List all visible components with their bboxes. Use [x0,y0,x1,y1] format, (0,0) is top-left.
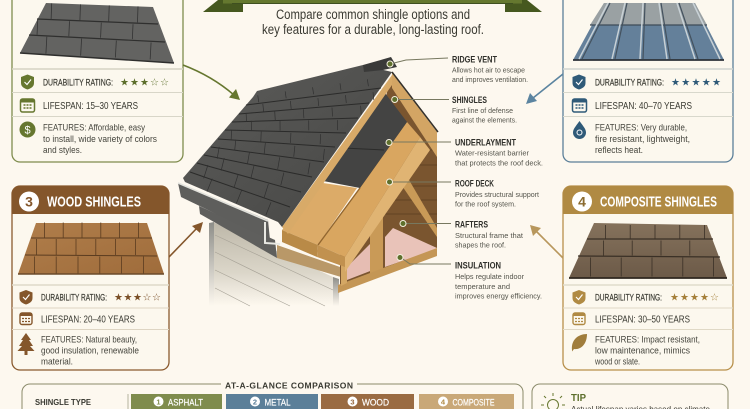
arrow: asphalt to roof [183,65,240,100]
front rake board [282,75,392,234]
callout: insulation: INSULATION [455,260,501,272]
durability rating: ★★★☆☆ [120,78,169,88]
callout: rafters: RAFTERS [455,220,488,230]
metal roofing swatch [573,3,724,60]
column: wood [321,394,414,409]
composite shingle swatch [569,223,727,278]
durability rating: DURABILITY RATING: [43,78,113,88]
lifespan: LIFESPAN: 15–30 YEARS [43,101,138,112]
features [594,334,700,366]
durability rating: DURABILITY RATING: [595,292,662,304]
post [370,205,383,276]
column: metal: METAL [264,398,290,408]
ridge vent [363,57,397,72]
icon: calendar [572,99,586,112]
asphalt shingle swatch [20,3,174,63]
features: FEATURES: Natural beauty, [41,334,137,344]
icon: tree [18,333,34,355]
panel: asphalt shingles [12,0,183,162]
durability rating: DURABILITY RATING: [595,78,664,88]
callout: shingles: SHINGLES [452,95,487,106]
callout: ridge vent: Allows hot air to escape [452,66,525,74]
icon: calendar [20,313,32,324]
icon: calendar [573,313,585,324]
icon: shield [21,74,34,90]
callout: ridge vent [387,54,528,84]
callout: rafters [400,220,524,250]
lifespan: LIFESPAN: 20–40 YEARS [41,314,135,326]
durability rating: DURABILITY RATING: [41,292,107,304]
icon: leaf [572,334,587,352]
icon: shield [572,74,586,90]
callout: shingles [392,95,517,124]
features: FEATURES: Impact resistant, [595,334,700,344]
callout: insulation: improves energy efficiency. [455,292,542,300]
callout: roof deck [386,178,540,208]
callout: shingles: against the elements. [452,116,517,124]
column: composite: 4 [441,398,446,406]
number badge: 4 [578,194,586,210]
features: fire resistant, lightweight, [595,134,690,144]
features: good insulation, renewable [41,346,139,356]
callout: roof deck: ROOF DECK [455,178,494,190]
callout: insulation: Helps regulate indoor [455,272,524,281]
callout: roof deck: for the roof system. [455,200,516,208]
shingled roof [183,65,392,227]
panel: comparison table [22,380,523,409]
callout: shingles: First line of defense [452,106,513,115]
wood shingle swatch [18,223,164,274]
icon: light bulb [541,393,565,409]
features: FEATURES: Affordable, easy [43,122,145,132]
callout: ridge vent: and improves ventilation. [452,75,528,84]
icon: dollar [20,122,36,138]
panel: tip [532,384,728,409]
column: wood: 3 [350,398,355,406]
icon: shield [20,290,32,304]
durability rating: ★★★★★ [671,78,721,88]
features: low maintenance, mimics [595,346,690,356]
arrow: wood to roof [169,222,203,257]
soffit fascia [199,206,277,258]
column: asphalt: ASPHALT [168,398,203,408]
sill board [338,248,437,293]
top plate [277,245,341,277]
callout: ridge vent: RIDGE VENT [452,54,497,66]
insulation [347,228,437,280]
title banner [203,0,542,12]
features [595,122,690,155]
card header [12,186,169,214]
roof deck boards [282,122,420,267]
features: reflects heat. [595,145,643,155]
callout: underlayment: Water-resistant barrier [455,148,529,158]
gutter [178,183,280,244]
column: asphalt [131,394,222,409]
panel: metal shingles [563,0,733,162]
interior back wall [340,75,437,290]
features: material. [41,356,73,366]
column: asphalt: 1 [156,398,161,406]
icon: water drop [573,121,586,139]
column: metal [226,394,318,409]
underlayment [318,93,407,188]
callout: roof deck: Provides structural support [455,190,540,199]
number badge [19,192,39,212]
subtitle: Compare common shingle options and [276,7,470,22]
number badge: 3 [25,194,33,210]
durability rating: ★★★★☆ [670,292,719,304]
tip heading: TIP [571,393,586,404]
features [43,122,157,155]
column: wood: WOOD [362,398,389,408]
callout: underlayment: UNDERLAYMENT [455,138,516,148]
features: and styles. [43,145,82,155]
panel: composite shingles [563,186,733,370]
callout: insulation: temperature and [455,282,510,291]
column: metal: 2 [253,398,257,406]
wall siding [209,222,339,306]
features: FEATURES: Very durable, [595,122,687,132]
vertical stud [341,258,347,286]
features [41,334,139,366]
features: wood or slate. [594,356,640,366]
icon: dollar: $ [24,124,31,136]
roof cutaway illustration [178,57,438,306]
durability rating: ★★★☆☆ [114,292,161,304]
lifespan: LIFESPAN: 40–70 YEARS [595,101,692,112]
arrow: composite to roof [530,225,563,258]
lifespan: LIFESPAN: 30–50 YEARS [595,314,690,326]
panel: wood shingles [12,186,169,370]
callout: insulation [397,254,542,300]
callout: underlayment [386,138,543,168]
card title: WOOD SHINGLES [47,194,141,210]
inner rafter [398,173,437,237]
table heading: AT-A-GLANCE COMPARISON [225,380,353,390]
subtitle: key features for a durable, long-lasting roof. [262,22,484,37]
features: to install, wide variety of colors [43,134,157,144]
callout: rafters: shapes the roof. [455,240,506,250]
callout: underlayment: that protects the roof deck. [455,158,543,168]
number badge [572,192,592,212]
subtitle [262,7,484,37]
row label: SHINGLE TYPE [35,397,91,407]
callout: rafters: Structural frame that [455,231,524,240]
outer rafter right [392,73,437,157]
column: composite: COMPOSITE [452,398,494,408]
card header [563,186,733,214]
column: composite [419,394,514,409]
arrow: metal to roof [526,74,563,104]
icon: calendar [20,99,34,112]
icon: shield [572,290,586,304]
